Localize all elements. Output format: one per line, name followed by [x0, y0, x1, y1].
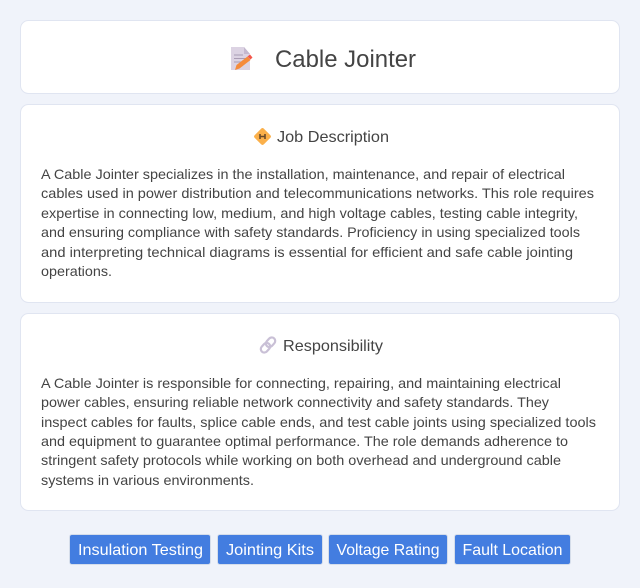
icon: construction diamond — [253, 127, 272, 146]
tag: Jointing Kits: Jointing Kits — [226, 542, 314, 559]
text block: job description: expertise in connecting low, medium, and high voltage cables, testing cable integrity, — [41, 205, 578, 221]
panel: title — [20, 20, 620, 94]
text block: job description: A Cable Jointer specializes in the installation, maintenance, and repair of electrical — [41, 166, 565, 182]
tag: Fault Location: Fault Location — [462, 542, 562, 559]
icon: memo with pencil — [231, 47, 252, 70]
text block: responsibility: power cables, ensuring reliable network connectivity and safety standards. They — [41, 394, 549, 410]
text block: job description: and ensuring compliance with safety standards. Proficiency in using specialized tools — [41, 224, 580, 240]
text block: responsibility: A Cable Jointer is responsible for connecting, repairing, and maintaining electrical — [41, 375, 561, 391]
panel: responsibility — [20, 314, 620, 510]
text block: job description: operations. — [41, 263, 112, 279]
text block: responsibility: systems in various environments. — [41, 472, 254, 488]
text block: job description: and interpreting technical diagrams is essential for efficient and safe cable jointing — [41, 244, 573, 260]
text block: responsibility — [41, 375, 596, 488]
heading: Cable Jointer: Cable Jointer — [275, 46, 416, 73]
tag: Insulation Testing — [70, 534, 210, 564]
text block: responsibility: inspect cables for faults, splice cable ends, and test cable joints using specialized tools — [41, 414, 596, 430]
text block: job description: cables used in power distribution and telecommunications networks. This role requires — [41, 185, 594, 201]
tag: Insulation Testing: Insulation Testing — [78, 542, 203, 559]
tag: Jointing Kits — [218, 534, 322, 564]
tag: Voltage Rating — [328, 534, 448, 564]
text block: responsibility: stringent safety protocols while working on both overhead and underground cable — [41, 452, 561, 468]
text block: job description — [41, 166, 594, 279]
tag: Fault Location — [454, 534, 570, 564]
icon: link — [259, 336, 277, 354]
heading: Responsibility: Responsibility — [283, 338, 383, 355]
heading: Job Description: Job Description — [277, 129, 389, 146]
panel: job description — [20, 104, 620, 302]
text block: responsibility: and equipment to guarantee optimal performance. The role demands adherence to — [41, 433, 568, 449]
tag: Voltage Rating: Voltage Rating — [336, 542, 440, 559]
